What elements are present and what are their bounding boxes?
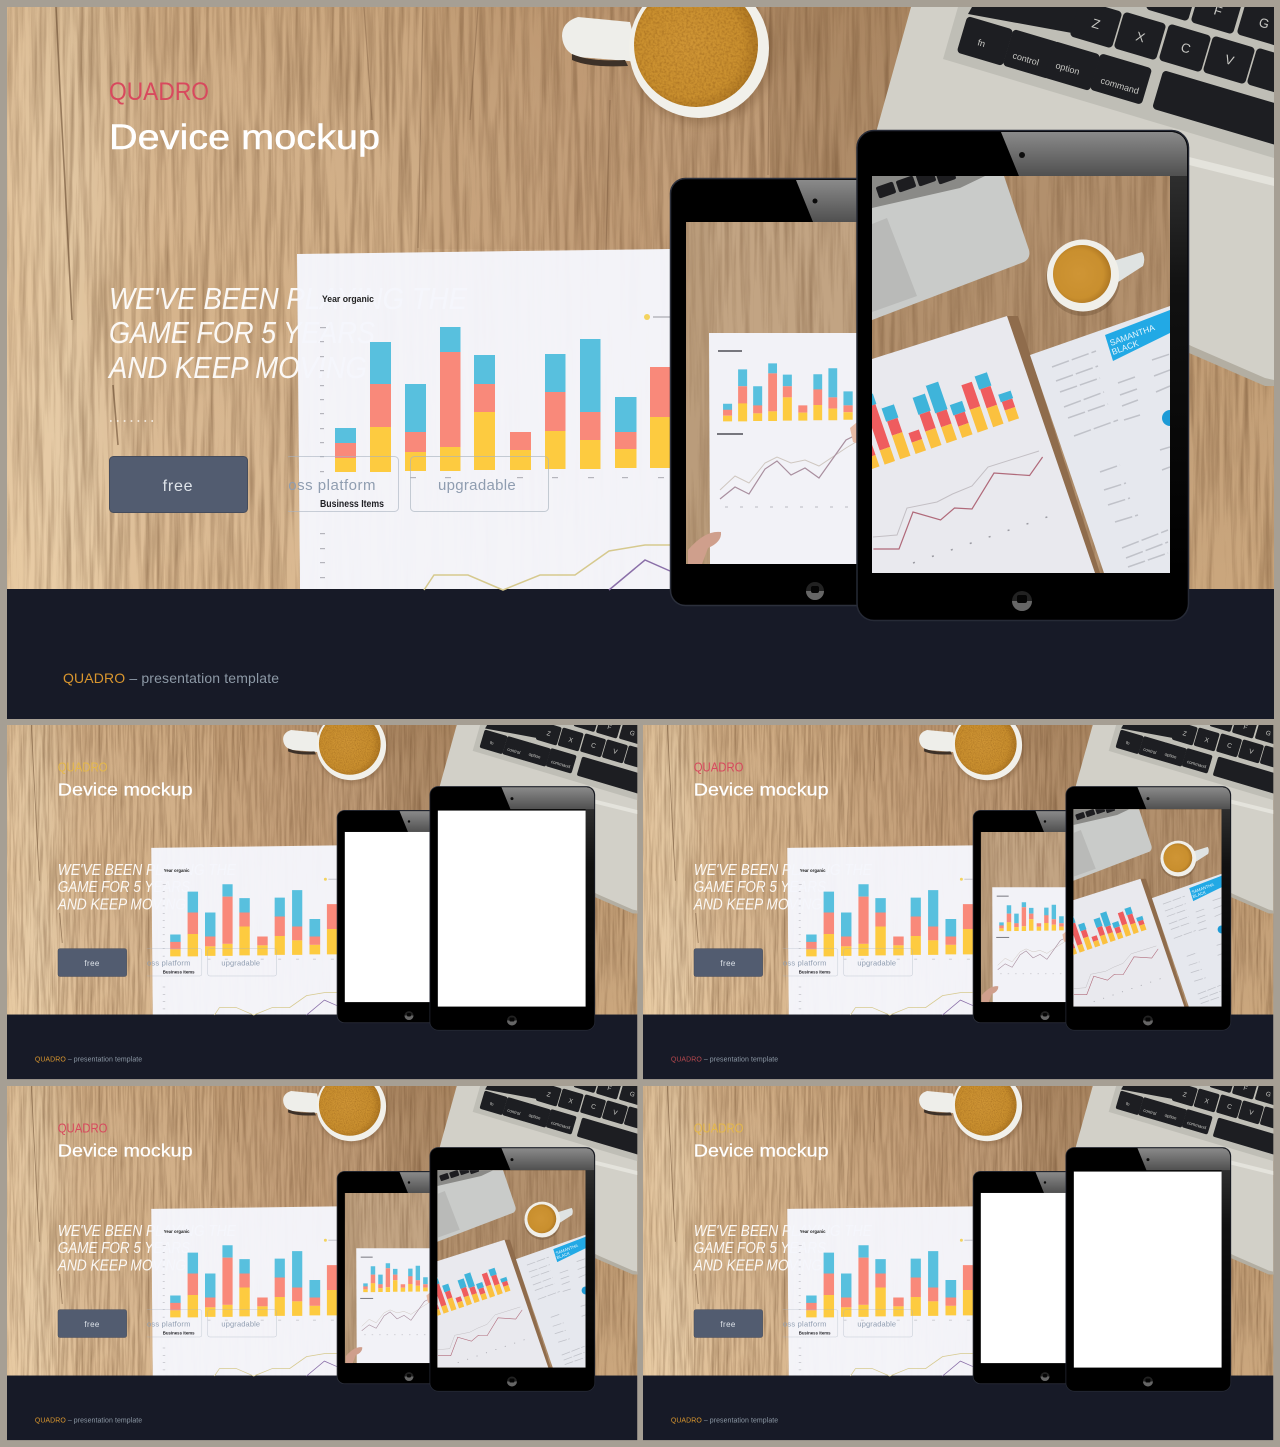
tagline: WE'VE BEEN PLAYING THE [109,281,467,316]
tagline: AND KEEP MOVING [693,897,822,914]
brand label: QUADRO [58,760,108,774]
tagline: GAME FOR 5 YEARS [694,1240,827,1257]
free button: free [720,959,736,968]
free button [694,1310,763,1337]
cross platform button [140,1310,202,1337]
paper sub-heading: Business Items [799,970,831,976]
slide: main featured mockup [7,0,1280,719]
upgradable button [844,1310,912,1337]
footer band [643,1376,1273,1440]
slide title: Device mockup [58,780,193,800]
footer band [7,589,1274,719]
slide title: Device mockup [58,1141,193,1161]
big tablet screen photo [424,1166,586,1368]
footer band [643,1015,1273,1079]
chart heading on paper: Year organic [800,1229,826,1234]
small tablet [973,810,1115,1023]
paper sub-heading: Business Items [320,499,384,510]
footer caption: QUADRO – presentation template [35,1417,142,1424]
big tablet [857,130,1188,620]
slide: blank screens, yellow label [7,708,650,1079]
upgradable button: upgradable [857,958,896,967]
upgradable button [208,949,276,976]
upgradable button: upgradable [221,1319,260,1328]
tagline: AND KEEP MOVING [57,1258,186,1275]
desk photo background [643,708,1280,1015]
upgradable button [844,949,912,976]
small tablet [670,178,856,606]
footer band [7,1376,637,1440]
tagline: WE'VE BEEN PLAYING THE [58,1223,236,1240]
dotted separator [110,420,153,422]
free button [694,949,763,976]
slide title: Device mockup [109,118,380,157]
tagline: GAME FOR 5 YEARS [109,315,375,350]
footer caption: QUADRO – presentation template [63,670,279,686]
small tablet screen photo [345,1193,435,1363]
paper sheet with charts [151,845,337,1015]
chart heading on paper: Year organic [164,868,190,873]
slide title: Device mockup [694,780,829,800]
big tablet [430,786,595,1030]
desk photo background [643,1069,1280,1376]
chart heading on paper: Year organic [322,294,374,304]
free button: free [84,959,100,968]
paper sheet with charts [787,845,973,1015]
paper sheet with charts [151,1206,337,1376]
cross platform button: cross platform [140,958,191,967]
small tablet screen photo [981,832,1071,1002]
brand label: QUADRO [109,78,209,106]
free button: free [163,478,193,495]
tagline [57,864,152,910]
paper sub-heading: Business Items [163,1331,195,1337]
upgradable button [410,456,548,512]
big tablet blank screen [438,811,586,1007]
paper sheet with charts [297,249,671,590]
cross platform button: cross platform [776,958,827,967]
big tablet [430,1147,595,1391]
footer band [7,1015,637,1079]
big tablet [1066,786,1231,1030]
tagline: WE'VE BEEN PLAYING THE [58,862,236,879]
small tablet screen photo [686,222,868,564]
tagline: WE'VE BEEN PLAYING THE [694,1223,872,1240]
footer caption: QUADRO – presentation template [35,1056,142,1063]
slide: photo screens, red label, lower row [7,1069,650,1440]
small tablet blank screen [981,1193,1068,1363]
tagline: GAME FOR 5 YEARS [58,1240,191,1257]
big tablet screen photo [1060,805,1222,1007]
tagline: AND KEEP MOVING [57,897,186,914]
cross platform button [776,949,838,976]
upgradable button: upgradable [438,477,516,494]
cross platform button [776,1310,838,1337]
footer caption: QUADRO – presentation template [671,1417,778,1424]
brand label: QUADRO [58,1121,108,1135]
free button [58,1310,127,1337]
paper sub-heading: Business Items [163,970,195,976]
free button: free [720,1320,736,1329]
footer caption: QUADRO – presentation template [671,1056,778,1063]
tagline [693,1223,872,1275]
paper sheet with charts [787,1206,973,1376]
upgradable button: upgradable [221,958,260,967]
chart heading on paper: Year organic [164,1229,190,1234]
slide: photo screens, red label [643,708,1280,1079]
slide title: Device mockup [694,1141,829,1161]
small tablet [337,1171,479,1384]
big tablet screen photo [872,176,1170,573]
tagline: WE'VE BEEN PLAYING THE [694,862,872,879]
desk photo background [7,708,650,1015]
desk photo background [7,0,1280,589]
small tablet [336,810,430,1023]
paper sub-heading: Business Items [799,1331,831,1337]
cross platform button: cross platform [275,477,376,494]
small tablet blank screen [345,832,432,1002]
cross platform button [140,949,202,976]
cross platform button [275,456,398,512]
brand label: QUADRO [694,1121,744,1135]
cross platform button: cross platform [776,1319,827,1328]
small tablet [973,1171,1115,1384]
upgradable button: upgradable [857,1319,896,1328]
tagline [57,1223,236,1275]
big tablet blank screen [1074,1172,1222,1368]
free button: free [84,1320,100,1329]
brand label: QUADRO [694,760,744,774]
desk photo background [7,1069,650,1376]
free button [58,949,127,976]
slide: blank screens, yellow label, lower row [643,1069,1280,1440]
chart heading on paper: Year organic [800,868,826,873]
tagline [108,288,298,378]
free button [110,456,248,512]
tagline [693,862,872,914]
tagline: AND KEEP MOVING [107,350,367,385]
big tablet [1066,1147,1231,1391]
tagline: GAME FOR 5 YEARS [58,879,191,896]
tagline: AND KEEP MOVING [693,1258,822,1275]
cross platform button: cross platform [140,1319,191,1328]
tagline: GAME FOR 5 YEARS [694,879,827,896]
upgradable button [208,1310,276,1337]
